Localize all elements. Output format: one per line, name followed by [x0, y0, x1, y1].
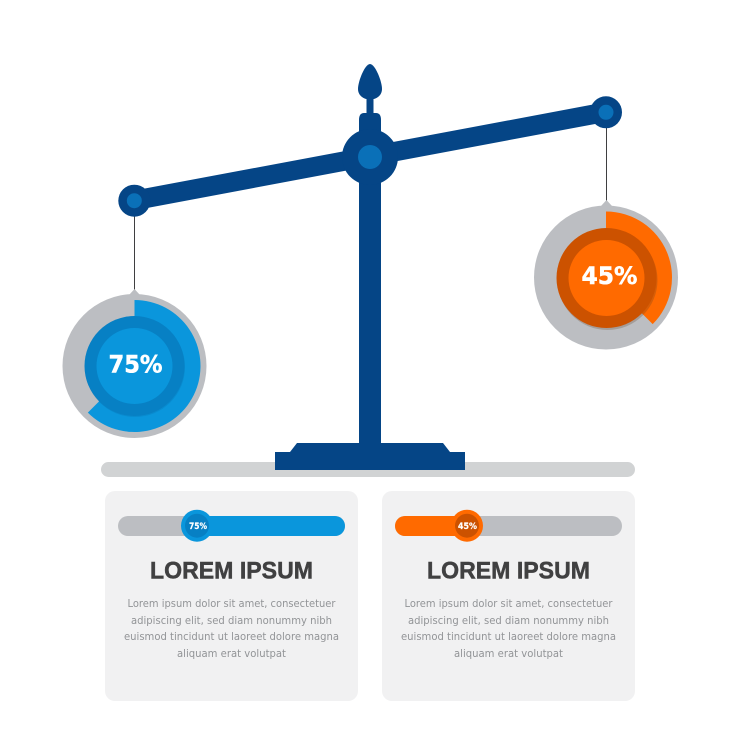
gauge disc — [62, 294, 206, 438]
body text: euismod tincidunt ut laoreet dolore magna — [401, 630, 616, 643]
knob label: 45% — [458, 522, 477, 532]
hanger nub — [129, 289, 140, 295]
percent label: 75% — [108, 350, 162, 378]
body text — [124, 597, 339, 660]
scale post and base — [275, 99, 465, 470]
slider knob centre — [455, 514, 479, 538]
knob label: 75% — [189, 522, 207, 532]
body text: euismod tincidunt ut laoreet dolore magna — [124, 630, 339, 643]
progress track — [395, 516, 622, 536]
dark ring — [84, 316, 184, 416]
left gauge 75% — [62, 289, 206, 438]
body text — [401, 597, 616, 660]
heading: LOREM IPSUM — [427, 558, 590, 584]
inner circle — [96, 328, 172, 404]
right beam end — [590, 96, 622, 128]
slider knob centre — [185, 514, 209, 538]
right string — [606, 122, 608, 206]
pivot centre — [358, 145, 382, 169]
body text: Lorem ipsum dolor sit amet, consectetuer — [404, 597, 613, 610]
body text: adipiscing elit, sed diam nonummy nibh — [131, 614, 332, 627]
panel: left card — [105, 491, 358, 701]
panel: right card — [382, 491, 635, 701]
heading: LOREM IPSUM — [150, 558, 313, 584]
right beam end centre — [598, 105, 614, 120]
progress fill — [197, 516, 345, 536]
gauge disc — [534, 206, 678, 350]
left string — [134, 210, 136, 295]
ring shadow — [85, 317, 185, 417]
ground bar — [101, 462, 635, 477]
right gauge 45% — [534, 200, 678, 350]
percent label: 45% — [582, 262, 638, 290]
body text: aliquam erat volutpat — [454, 647, 564, 660]
inner circle — [568, 240, 644, 316]
left beam end centre — [127, 193, 142, 208]
slider knob — [451, 510, 483, 542]
card background — [382, 491, 635, 701]
slider knob — [181, 510, 213, 542]
dark ring — [556, 228, 656, 328]
pivot hub — [342, 129, 398, 185]
card background — [105, 491, 358, 701]
progress fill — [395, 516, 467, 536]
body text: aliquam erat volutpat — [177, 647, 287, 660]
progress wedge — [606, 212, 672, 324]
balance scale — [118, 64, 622, 470]
body text: adipiscing elit, sed diam nonummy nibh — [408, 614, 609, 627]
body text: Lorem ipsum dolor sit amet, consectetuer — [128, 597, 336, 610]
finial — [358, 64, 382, 100]
hanger nub — [601, 200, 612, 206]
ring shadow — [558, 230, 658, 330]
left beam end — [118, 185, 150, 217]
beam — [134, 112, 606, 200]
progress track — [118, 516, 345, 536]
progress wedge — [88, 300, 200, 432]
